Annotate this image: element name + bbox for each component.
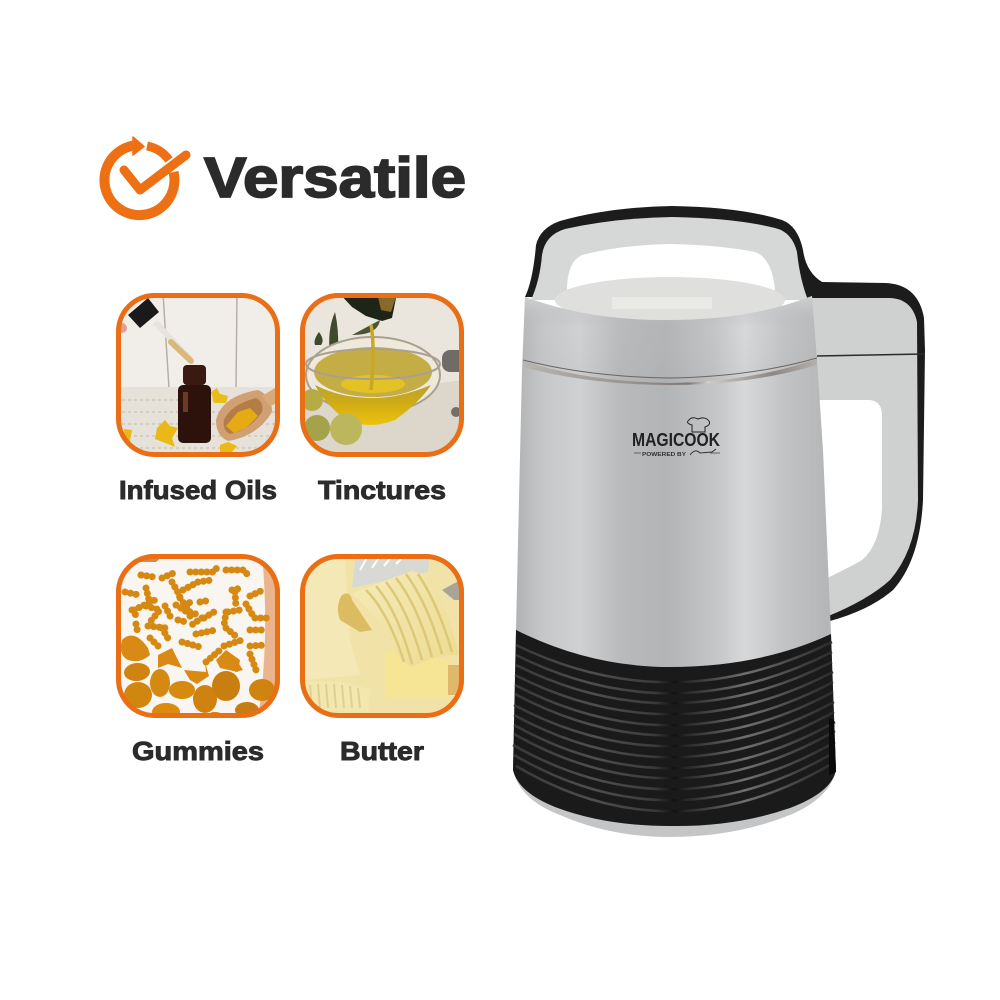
product: soymilk maker appliance bbox=[513, 206, 925, 837]
panel: tinctures photo bbox=[300, 293, 466, 457]
panel: infused oils photo bbox=[116, 293, 282, 457]
side handle: opening bbox=[810, 400, 882, 586]
label: tinctures: Tinctures bbox=[318, 475, 446, 505]
black rim of handles bbox=[525, 206, 925, 621]
lid bbox=[555, 277, 785, 323]
black ribbed base bbox=[513, 630, 836, 826]
title: Versatile bbox=[204, 146, 466, 210]
upper body band and lower body bbox=[513, 296, 836, 770]
brand logo: MAGICOOK bbox=[632, 430, 720, 450]
base ribs bbox=[513, 642, 835, 811]
label: infused oils: Infused Oils bbox=[119, 475, 277, 505]
icon: orange circular arrow with checkmark bbox=[104, 137, 186, 215]
side handle: grey grip bbox=[800, 298, 918, 617]
top carry handle: opening bbox=[567, 244, 775, 290]
top carry handle: light grey grip bbox=[531, 217, 808, 300]
label: butter: Butter bbox=[340, 736, 424, 766]
brand logo bbox=[632, 418, 720, 458]
panel: gummies photo bbox=[116, 554, 280, 721]
seam on handle bbox=[817, 354, 925, 356]
steel band bbox=[523, 359, 817, 385]
panel: butter photo bbox=[300, 554, 464, 718]
brand logo: POWERED BY bbox=[642, 452, 686, 458]
side vent bbox=[829, 718, 836, 775]
label: gummies: Gummies bbox=[132, 736, 264, 766]
base foot bbox=[513, 770, 836, 837]
